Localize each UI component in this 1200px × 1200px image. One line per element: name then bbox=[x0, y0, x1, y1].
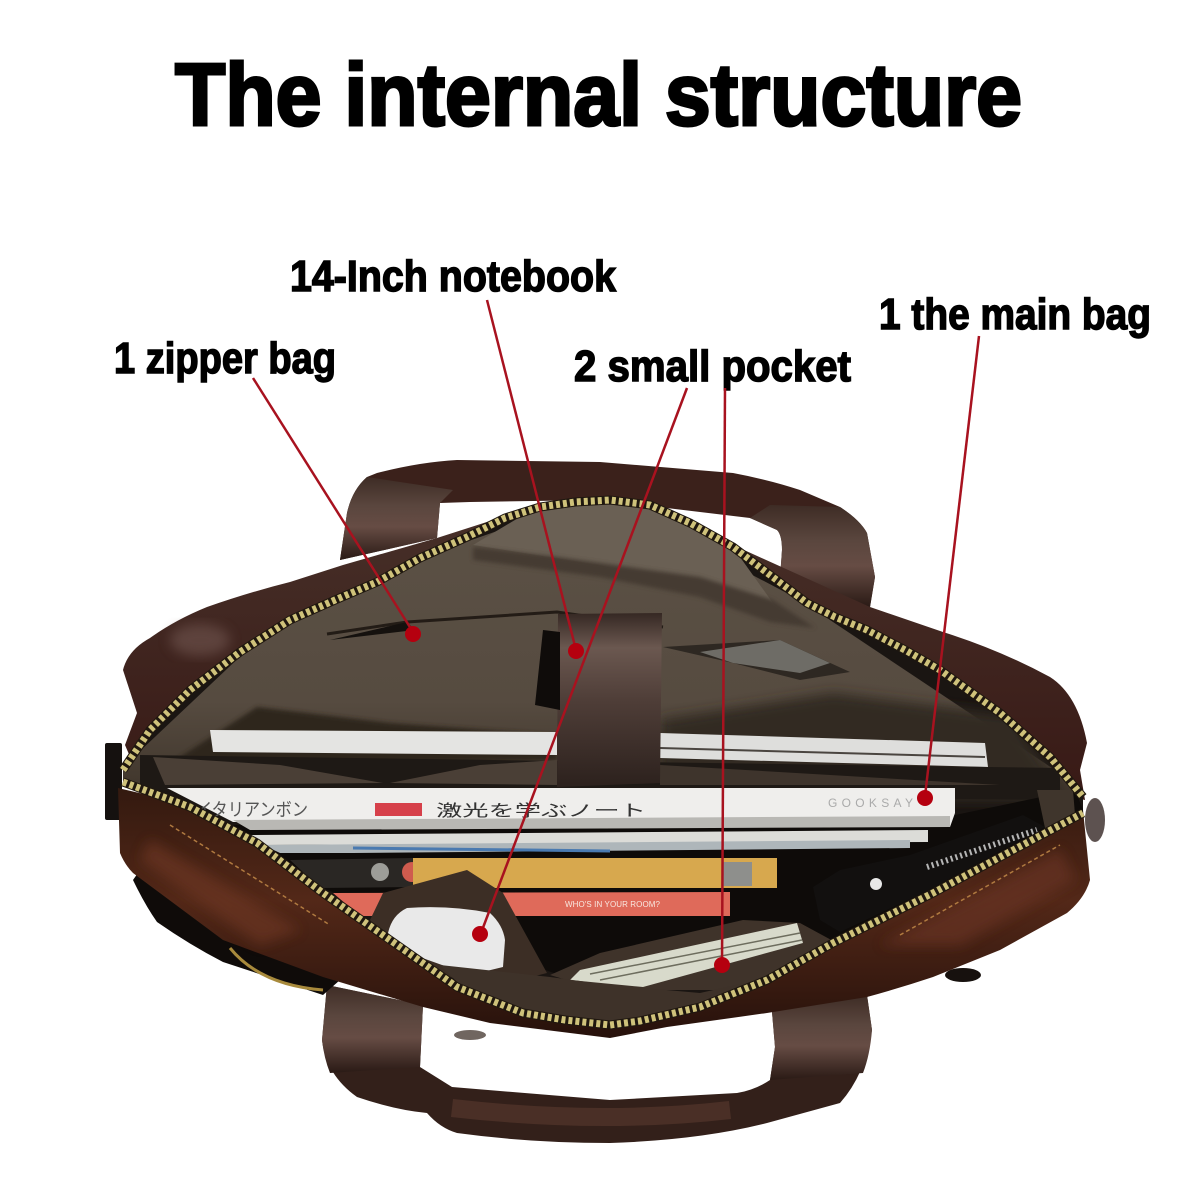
label: 2 small pocket bbox=[472, 342, 851, 973]
label: 1 zipper bag: 1 zipper bag bbox=[114, 334, 336, 383]
phone pocket bbox=[663, 640, 850, 680]
cash in pocket bbox=[570, 923, 803, 987]
magazine: 激光を学ぶノート bbox=[436, 802, 646, 820]
magazine bbox=[167, 788, 955, 853]
black storage area bbox=[234, 792, 1083, 973]
label: 2 small pocket: 2 small pocket bbox=[574, 342, 851, 391]
lower corner lining bbox=[1037, 790, 1075, 828]
pebbled rim bbox=[473, 547, 815, 628]
upper leather bbox=[123, 505, 1087, 800]
lining bbox=[120, 495, 1085, 790]
black zip wallet bbox=[870, 827, 1038, 890]
pouch bbox=[370, 870, 547, 990]
books bbox=[290, 858, 777, 916]
magazine: GOOKSAY bbox=[828, 796, 913, 810]
label: 1 zipper bag bbox=[114, 334, 421, 642]
front pocket bbox=[550, 920, 835, 990]
stitching bbox=[170, 825, 1060, 935]
leather highlight left bbox=[170, 624, 230, 656]
label: 14-Inch notebook: 14-Inch notebook bbox=[290, 252, 616, 301]
top handle bbox=[340, 460, 875, 607]
pebbled bottom rim bbox=[442, 965, 730, 1020]
title: The internal structure bbox=[175, 45, 1022, 144]
side buckle bbox=[1085, 798, 1105, 842]
zipper pocket slit bbox=[327, 612, 663, 634]
mouse bbox=[388, 907, 505, 975]
laptop bbox=[210, 730, 988, 767]
magazine: イタリアンボン bbox=[196, 800, 308, 820]
zipper bbox=[123, 500, 1083, 1025]
infographic: bag internal structure bbox=[105, 60, 1150, 1143]
bottom handle bbox=[322, 985, 872, 1143]
dark gap and fabric divider bbox=[140, 755, 1060, 800]
upper fabric fold bbox=[474, 505, 770, 599]
label: 1 the main bag: 1 the main bag bbox=[879, 290, 1151, 339]
bag photo bbox=[100, 460, 1105, 1143]
side tab bbox=[105, 743, 122, 820]
underside strip and strap bbox=[133, 870, 981, 1040]
lower leather highlights bbox=[140, 840, 1075, 945]
lower leather bbox=[118, 788, 1090, 1038]
label: 1 the main bag bbox=[879, 290, 1151, 806]
lower pocket shade bbox=[180, 705, 558, 760]
bag interior bbox=[123, 504, 1083, 1020]
pocket strap bbox=[535, 613, 662, 787]
label: 14-Inch notebook bbox=[290, 252, 616, 659]
books: WHO'S IN YOUR ROOM? bbox=[565, 900, 661, 909]
